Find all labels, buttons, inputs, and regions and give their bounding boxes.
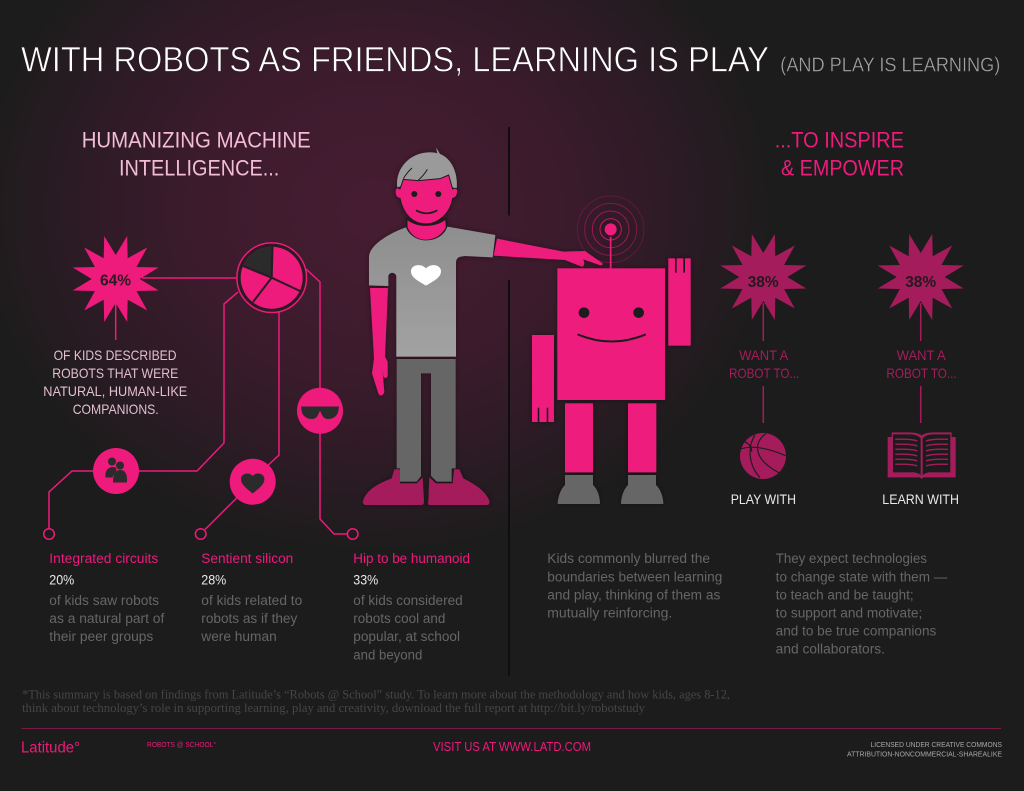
text block: hip to be humanoid: and beyond xyxy=(353,648,422,662)
text block: kids commonly blurred: and play, thinking of them as xyxy=(547,588,721,602)
icon: sunglasses xyxy=(297,388,343,434)
title: WITH ROBOTS AS FRIENDS, LEARNING IS PLAY xyxy=(21,41,769,80)
hair fringe strand xyxy=(403,168,427,180)
heading: humanizing machine intelligence xyxy=(82,127,311,180)
title: (AND PLAY IS LEARNING) xyxy=(780,55,1000,77)
starburst: 38% learn xyxy=(878,234,964,320)
label: learn with: LEARN WITH xyxy=(882,491,959,507)
footer: visit us: VISIT US AT WWW.LATD.COM xyxy=(433,739,591,754)
text block: sentient silicon: were human xyxy=(200,629,277,644)
figure: robot xyxy=(532,196,691,504)
centre divider xyxy=(508,127,510,676)
boy right arm xyxy=(494,239,603,267)
text block: hip to be humanoid: popular, at school xyxy=(353,629,460,644)
text block: kids commonly blurred: boundaries between learning xyxy=(547,570,722,584)
text block: they expect technologies xyxy=(776,551,948,656)
starburst: 38% play: 38% xyxy=(748,274,779,291)
text block: kids commonly blurred: Kids commonly blurred the xyxy=(547,551,710,566)
text block: integrated circuits xyxy=(49,551,165,644)
text block: they expect technologies: They expect technologies xyxy=(776,551,927,566)
footer: license xyxy=(847,740,1002,758)
heading: to inspire and empower: ...TO INSPIRE xyxy=(775,127,904,152)
text block: sentient silicon xyxy=(200,551,302,644)
robot raised arm xyxy=(668,258,691,346)
icon: open book xyxy=(888,432,956,479)
shirt heart xyxy=(411,265,441,286)
boy hair xyxy=(397,147,457,189)
starburst: 38% learn: 38% xyxy=(905,274,936,291)
heading: to inspire and empower xyxy=(775,127,904,180)
text block: they expect technologies: to support and motivate; xyxy=(776,606,922,620)
text block: sentient silicon: 28% xyxy=(201,573,226,588)
panel: want a robot to play with xyxy=(720,234,806,507)
text: want a robot to, second xyxy=(886,347,957,381)
text block: hip to be humanoid: robots cool and xyxy=(353,611,445,626)
text block: integrated circuits: as a natural part of xyxy=(49,611,165,626)
starburst: 64%: 64% xyxy=(100,272,131,290)
text block: kids commonly blurred xyxy=(547,551,722,620)
boy shoes xyxy=(363,469,489,505)
text block: integrated circuits: 20% xyxy=(49,573,74,588)
text block: integrated circuits: of kids saw robots xyxy=(49,593,159,608)
robot signal rings xyxy=(577,196,644,263)
stat text: 64% of kids: ROBOTS THAT WERE xyxy=(52,365,178,381)
footnote: think about technology’s role in supporting learning, play and creativity, download the full report at http://bit.ly/robotstudy xyxy=(22,701,646,715)
heading: humanizing machine intelligence: INTELLIGENCE... xyxy=(119,155,279,180)
robot legs xyxy=(565,403,656,472)
text block: they expect technologies: and to be true companions xyxy=(776,624,937,638)
robot body xyxy=(557,268,665,400)
starburst: 64% xyxy=(73,236,159,322)
text block: sentient silicon: Sentient silicon xyxy=(201,551,293,566)
stat text: 64% of kids xyxy=(43,347,187,417)
boy t-shirt xyxy=(369,227,495,357)
text: want a robot to: WANT A xyxy=(739,347,789,363)
robot feet xyxy=(558,475,663,504)
heading: humanizing machine intelligence: HUMANIZING MACHINE xyxy=(82,127,311,152)
boy head xyxy=(395,175,458,224)
footer: robots at school: ROBOTS @ SCHOOL° xyxy=(147,741,216,749)
text block: hip to be humanoid xyxy=(353,551,470,662)
icon: basketball xyxy=(740,433,786,479)
text block: hip to be humanoid: 33% xyxy=(353,573,378,588)
robot lowered arm xyxy=(532,335,554,422)
text block: they expect technologies: to teach and be taught; xyxy=(776,588,914,602)
figure: boy xyxy=(363,147,603,505)
footer: license: LICENSED UNDER CREATIVE COMMONS xyxy=(870,740,1002,749)
text: want a robot to: ROBOT TO... xyxy=(729,365,799,381)
text block: integrated circuits: Integrated circuits xyxy=(49,551,159,566)
panel: want a robot to learn with xyxy=(878,234,964,507)
text block: kids commonly blurred: mutually reinforcing. xyxy=(547,606,672,620)
boy left arm xyxy=(370,288,388,395)
text: want a robot to, second: WANT A xyxy=(897,347,946,363)
footnote: *This summary is based on findings from Latitude’s “Robots @ School” study. To learn more about the methodology and how kids, ages 8-12, xyxy=(22,688,730,702)
footer: license: ATTRIBUTION-NONCOMMERCIAL-SHAREALIKE xyxy=(847,750,1002,758)
connector circuit lines xyxy=(44,269,358,539)
icon: friends group xyxy=(93,448,139,494)
boy neck xyxy=(407,218,447,241)
text: want a robot to, second: ROBOT TO... xyxy=(886,365,957,381)
footnote xyxy=(22,688,730,715)
text block: sentient silicon: of kids related to xyxy=(201,593,302,608)
boy trousers xyxy=(397,359,456,482)
text block: they expect technologies: and collaborators. xyxy=(776,642,885,656)
pie chart xyxy=(237,243,306,312)
text block: sentient silicon: robots as if they xyxy=(201,611,298,626)
footer rule xyxy=(22,728,1001,730)
stat text: 64% of kids: COMPANIONS. xyxy=(73,401,159,417)
text block: hip to be humanoid: Hip to be humanoid xyxy=(353,551,470,566)
starburst: 38% play xyxy=(720,234,806,320)
stat text: 64% of kids: NATURAL, HUMAN-LIKE xyxy=(43,383,187,399)
text: want a robot to xyxy=(729,347,799,381)
label: play with: PLAY WITH xyxy=(731,491,796,507)
icon: heart xyxy=(230,459,276,505)
text block: integrated circuits: their peer groups xyxy=(49,629,154,644)
footer: latitude logo: Latitude° xyxy=(21,740,80,756)
text block: hip to be humanoid: of kids considered xyxy=(353,593,463,608)
text block: they expect technologies: to change state with them — xyxy=(776,570,948,584)
stat text: 64% of kids: OF KIDS DESCRIBED xyxy=(54,347,177,363)
robot antenna xyxy=(608,237,613,268)
heading: to inspire and empower: & EMPOWER xyxy=(781,155,904,180)
